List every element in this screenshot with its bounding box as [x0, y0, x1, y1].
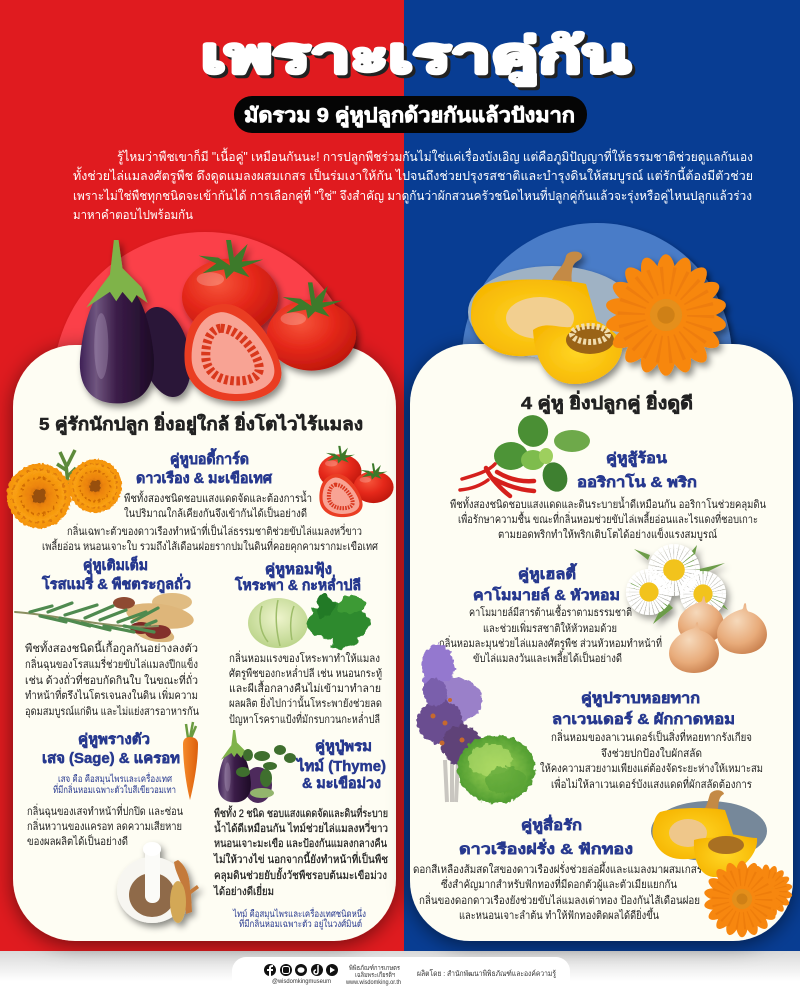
pair: chamomile and onion: กลิ่นหอมละมุนช่วยไล่แมลงศัตรูพืช ส่วนหัวหอมทำหน้าที่	[439, 635, 662, 650]
footer	[232, 957, 570, 1000]
circle behind left hero	[53, 232, 357, 536]
icon: onions	[669, 596, 767, 673]
pair: oregano and chili: ออริกาโน & พริก	[577, 473, 697, 491]
pair: thyme and eggplant	[213, 730, 388, 930]
pair: thyme and eggplant: หนอนเจาะมะเขือ และป้องกันแมลงกลางคืน	[214, 837, 387, 850]
red background	[0, 0, 404, 951]
heading: right panel: 4 คู่หู ยิ่งปลูกคู่ ยิ่งดูดี	[521, 390, 693, 415]
footer: @wisdomkingmuseum	[272, 978, 331, 985]
icon: chamomile	[630, 545, 728, 624]
icon: mortar with spices	[117, 842, 199, 923]
intro paragraph: เพราะไม่ใช่พืชทุกชนิดจะเข้ากันได้ การเลือกคู่ที่ "ใช่" จึงสำคัญ มาดูกันว่าผักสวนครัวชนิดไหนที่ปลูกคู่กันแล้วจะรุ่งหรือคู่ไหนปลูกแล้วร่วง	[73, 187, 752, 204]
pair: lavender and lettuce	[417, 644, 763, 803]
pair: thyme and eggplant: & มะเขือม่วง	[302, 775, 381, 792]
icon: calendula flowers	[703, 861, 793, 937]
pair: sage and carrot: คู่หูพรางตัว	[78, 732, 150, 748]
pair: lavender and lettuce: กลิ่นหอมของลาเวนเดอร์เป็นสิ่งที่หอยทากรังเกียจ	[551, 729, 752, 744]
pair: thyme and eggplant: ไทม์ คือสมุนไพรและเครื่องเทศชนิดหนึ่ง	[232, 907, 366, 920]
pair: sage and carrot: ที่มีกลิ่นหอมเฉพาะตัวใบสีเขียวอมเทา	[53, 783, 176, 796]
icon: carrot	[183, 722, 198, 800]
pair: chamomile and onion: คาโมมายล์ & หัวหอม	[473, 586, 620, 604]
pair: marigold and tomato: คู่หูบอดี้การ์ด	[170, 448, 249, 468]
pair: rosemary and legumes: ทำหน้าที่ตรึงไนโตรเจนลงในดิน เพิ่มความ	[25, 687, 198, 702]
footer: www.wisdomking.or.th	[345, 979, 401, 986]
pair: chamomile and onion: คู่หูเฮลตี้	[518, 563, 577, 583]
pair: lavender and lettuce: ให้คงความสวยงามเพียงแต่ต้องจัดระยะห่างให้เหมาะสม	[540, 762, 763, 775]
pair: french marigold and pumpkin: และหนอนเจาะลำต้น ทำให้ฟักทองติดผลได้ดียิ่งขึ้น	[459, 907, 659, 922]
pair: marigold and tomato: ดาวเรือง & มะเขือเทศ	[136, 470, 273, 487]
intro paragraph: รู้ไหมว่าพืชเขาก็มี "เนื้อคู่" เหมือนกันนะ! การปลูกพืชร่วมกันไม่ใช่แค่เรื่องบังเอิญ แต่คือภูมิปัญญาที่ให้ธรรมชาติช่วยดูแลกันเอง	[117, 147, 753, 165]
icon: pumpkin	[651, 790, 767, 877]
pair: sage and carrot: เสจ (Sage) & แครอท	[42, 751, 180, 767]
pair: marigold and tomato: ในปริมาณใกล้เคียงกันจึงเข้ากันได้เป็นอย่างดี	[124, 506, 307, 520]
pair: chamomile and onion: ขับไล่แมลงวันและเพลี้ยได้เป็นอย่างดี	[473, 650, 622, 665]
intro paragraph	[73, 147, 753, 222]
pair: sage and carrot	[27, 722, 199, 923]
pair: rosemary and legumes: เช่น ด้วงถั่วที่ชอบกัดกินใบ ในขณะที่ถั่ว	[25, 672, 198, 687]
footer: ผลิตโดย : สำนักพัฒนาพิพิธภัณฑ์และองค์ความรู้	[417, 969, 556, 978]
pair: basil and cabbage: ปัญหาโรคราแป้งที่มักรบกวนกะหล่ำปลี	[229, 711, 380, 726]
panel: left companions	[13, 345, 396, 941]
pair: oregano and chili: คู่หูสู้ร้อน	[606, 450, 667, 467]
pair: thyme and eggplant: ที่มีกลิ่นหอมเฉพาะตัว อยู่ในวงศ์มินต์	[239, 917, 362, 930]
hero: eggplant and tomatoes	[80, 240, 356, 403]
pair: chamomile and onion: คาโมมายล์มีสารต้านเชื้อราตามธรรมชาติ	[469, 604, 632, 619]
pair: sage and carrot: ของผลผลิตได้เป็นอย่างดี	[27, 834, 128, 848]
icon: tomatoes	[318, 446, 394, 517]
heading: left panel: 5 คู่รักนักปลูก ยิ่งอยู่ใกล้ ยิ่งโตไวไร้แมลง	[39, 411, 363, 436]
pair: lavender and lettuce: จึงช่วยปกป้องใบผักสลัด	[600, 747, 702, 760]
footer: พิพิธภัณฑ์การเกษตร	[349, 964, 400, 972]
pair: french marigold and pumpkin	[413, 790, 793, 937]
circle behind right hero	[462, 223, 732, 493]
icon: lavender	[417, 644, 482, 802]
hero: pumpkin and calendula	[468, 252, 728, 384]
intro paragraph: มาหาคำตอบไปพร้อมกัน	[73, 208, 193, 222]
pair: oregano and chili	[450, 411, 766, 541]
pair: chamomile and onion	[439, 545, 767, 673]
icon: cabbage	[248, 598, 308, 648]
icon: peanuts	[113, 593, 195, 642]
pair: french marigold and pumpkin: คู่หูสื่อรัก	[521, 814, 582, 834]
pair: basil and cabbage: และผีเสื้อกลางคืนไม่เข้ามาทำลาย	[229, 680, 381, 695]
pair: thyme and eggplant: คู่หูปู่พรม	[315, 739, 372, 755]
pair: marigold and tomato: พืชทั้งสองชนิดชอบแสงแดดจัดและต้องการน้ำ	[124, 490, 312, 505]
pair: thyme and eggplant: ได้อย่างดีเยี่ยม	[213, 883, 274, 898]
pair: marigold and tomato	[7, 446, 394, 553]
icon: rosemary	[15, 603, 158, 632]
blue background	[404, 0, 800, 951]
icon: basil	[308, 595, 368, 648]
footer: เฉลิมพระเกียรติฯ	[355, 971, 395, 979]
pair: basil and cabbage: คู่หูหอมฟุ้ง	[265, 561, 332, 578]
subtitle pill: มัดรวม 9 คู่หูปลูกด้วยกันแล้วปังมาก	[244, 104, 575, 129]
pair: basil and cabbage: โหระพา & กะหล่ำปลี	[234, 574, 361, 594]
pair: basil and cabbage: กลิ่นหอมแรงของโหระพาทำให้แมลง	[229, 650, 380, 665]
social icons	[264, 964, 338, 976]
pair: thyme and eggplant: พืชทั้ง 2 ชนิด ชอบแสงแดดจัดและดินที่ระบาย	[214, 805, 388, 820]
pair: french marigold and pumpkin: กลิ่นของดอกดาวเรืองยังช่วยขับไล่แมลงเต่าทอง ป้องกันไส้เดือนฝอย	[419, 892, 700, 907]
pair: french marigold and pumpkin: ดาวเรืองฝรั่ง & ฟักทอง	[459, 838, 633, 858]
pair: basil and cabbage: ศัตรูพืชของกะหล่ำปลี เช่น หนอนกระทู้	[229, 665, 382, 680]
pair: basil and cabbage	[229, 561, 382, 726]
pair: rosemary and legumes	[15, 555, 199, 718]
pair: thyme and eggplant: น้ำได้ดีเหมือนกัน ไทม์ช่วยไล่แมลงหวี่ขาว	[214, 820, 388, 835]
pair: lavender and lettuce: คู่หูปราบหอยทาก	[581, 691, 700, 707]
pair: marigold and tomato: กลิ่นเฉพาะตัวของดาวเรืองทำหน้าที่เป็นไล่ธรรมชาติช่วยขับไล่แมลงหวี่ขาว	[67, 523, 362, 538]
pair: french marigold and pumpkin: ซึ่งสำคัญมากสำหรับฟักทองที่มีดอกตัวผู้และตัวเมียแยกกัน	[441, 876, 677, 891]
pair: basil and cabbage: ผลผลิต ยิ่งไปกว่านั้นโหระพายังช่วยลด	[229, 695, 382, 710]
footer fade	[0, 951, 800, 981]
pair: lavender and lettuce: เพื่อไม่ให้ลาเวนเดอร์บังแสงแดดที่ผักสลัดต้องการ	[551, 776, 752, 791]
pair: french marigold and pumpkin: ดอกสีเหลืองส้มสดใสของดาวเรืองฝรั่งช่วยล่อผึ้งและแมลงมาผสมเกสร	[413, 861, 702, 876]
icon: marigold flowers	[7, 450, 122, 528]
pair: sage and carrot: กลิ่นฉุนของเสจทำหน้าที่ปกปิด และซ่อน	[27, 803, 183, 818]
pair: lavender and lettuce: ลาเวนเดอร์ & ผักกาดหอม	[552, 710, 735, 728]
intro paragraph: ทั้งช่วยไล่แมลงศัตรูพืช ดึงดูดแมลงผสมเกสร เป็นร่มเงาให้กัน ไปจนถึงช่วยปรุงรสชาติและบำรุงดินให้สมบูรณ์ แต่รักนี้ต้องมีตัวช่วย	[73, 166, 753, 184]
title: เพราะเราคู่กัน	[201, 30, 630, 86]
subtitle pill	[234, 96, 587, 133]
panel: right companions	[410, 344, 793, 941]
pair: thyme and eggplant: ไม่ให้วางไข่ นอกจากนี้ยังทำหน้าที่เป็นพืช	[213, 851, 388, 866]
pair: marigold and tomato: เพลี้ยอ่อน หนอนเจาะใบ รวมถึงไส้เดือนฝอยรากปมในดินที่คอยคุกคามรากมะเขือเทศ	[42, 538, 378, 553]
icon: eggplants and thyme	[218, 730, 296, 803]
pair: rosemary and legumes: อุดมสมบูรณ์แก่ดิน และไม่แย่งสารอาหารกัน	[25, 705, 199, 718]
pair: sage and carrot: เสจ คือ คือสมุนไพรและเครื่องเทศ	[58, 772, 172, 785]
pair: thyme and eggplant: ไทม์ (Thyme)	[295, 757, 386, 775]
pair: chamomile and onion: และช่วยเพิ่มรสชาติให้หัวหอมด้วย	[483, 620, 617, 635]
pair: sage and carrot: กลิ่นหวานของแครอท ลดความเสียหาย	[27, 818, 182, 833]
pair: rosemary and legumes: คู่หูเติมเต็ม	[83, 555, 148, 574]
pair: thyme and eggplant: คลุมดินช่วยยับยั้งวัชพืชรอบต้นมะเขือม่วง	[214, 867, 387, 882]
pair: rosemary and legumes: พืชทั้งสองชนิดนี้เกื้อกูลกันอย่างลงตัว	[25, 640, 198, 655]
icon: lettuce	[457, 735, 535, 803]
pair: rosemary and legumes: โรสแมรี่ & พืชตระกูลถั่ว	[41, 573, 191, 593]
pair: oregano and chili: ตามยอดพริกทำให้พริกเติบโตได้อย่างแข็งแรงสมบูรณ์	[498, 527, 717, 541]
icon: oregano	[494, 411, 590, 495]
icon: chili peppers	[460, 464, 534, 496]
pair: rosemary and legumes: กลิ่นฉุนของโรสแมรี่ช่วยขับไล่แมลงปีกแข็ง	[25, 656, 198, 671]
